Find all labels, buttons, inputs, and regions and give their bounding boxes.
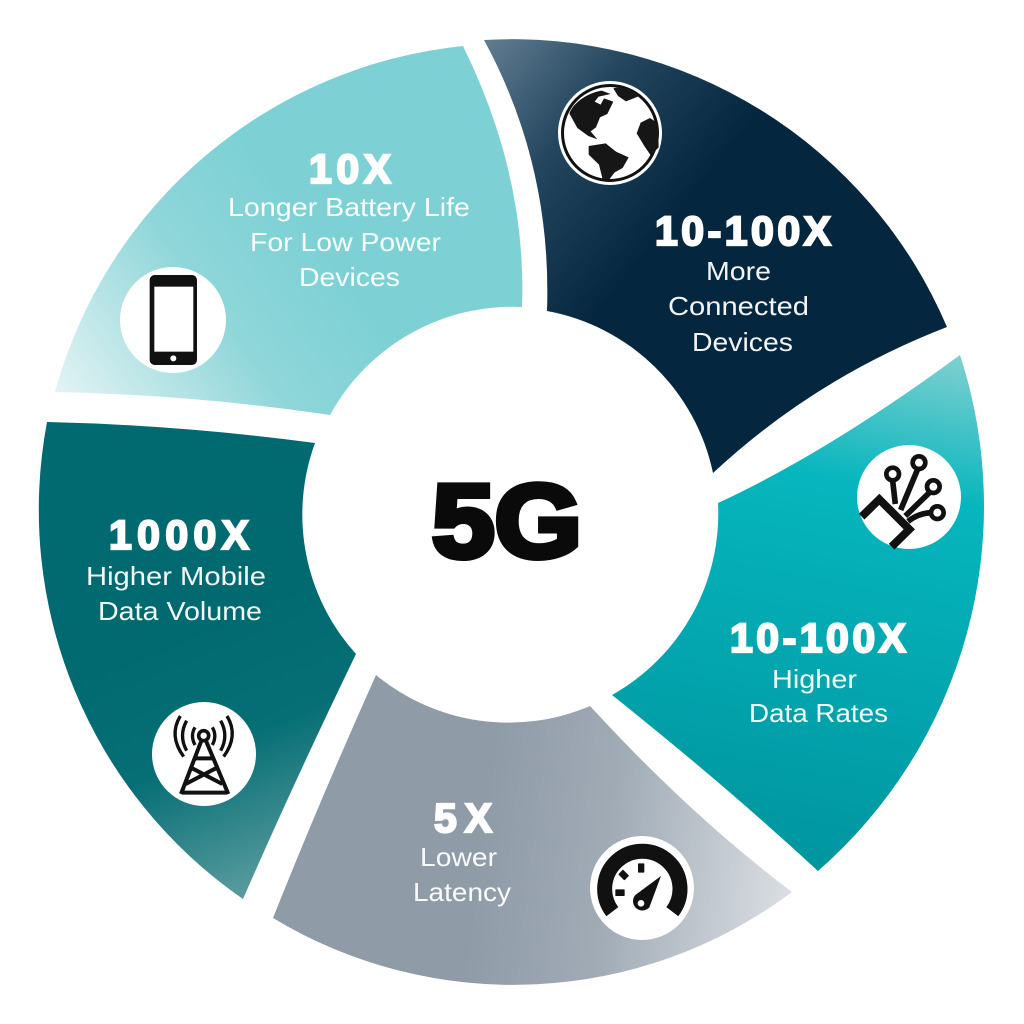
label: Lower Latency: [413, 842, 511, 907]
label: More Connected Devices: Devices: [692, 327, 793, 357]
label: Lower Latency: Lower: [420, 842, 497, 872]
label: Higher Data Rates: [749, 664, 888, 728]
segment: higher data rates: [612, 355, 984, 871]
icon: smartphone: [120, 267, 226, 373]
label: More Connected Devices: Connected: [668, 291, 809, 321]
label: Higher Mobile Data Volume: Data Volume: [98, 596, 262, 626]
stat: 1000X: 1000X: [109, 512, 249, 558]
stat: 10-100X: 10-100X: [655, 208, 831, 254]
label: Longer Battery Life For Low Power Devices: Longer Battery Life: [228, 192, 470, 222]
label: More Connected Devices: [668, 256, 809, 357]
segment: lower latency: [273, 675, 792, 985]
label: Higher Data Rates: Higher: [772, 664, 857, 694]
icon: globe: [558, 81, 662, 185]
center title: 5G: 5G: [432, 464, 582, 580]
stat: 10-100X: 10-100X: [730, 615, 906, 661]
label: Lower Latency: Latency: [413, 877, 511, 907]
label: Higher Mobile Data Volume: Higher Mobile: [86, 561, 266, 591]
segment: longer battery life: [55, 46, 522, 415]
label: Longer Battery Life For Low Power Devices: [228, 192, 470, 292]
label: Higher Mobile Data Volume: [86, 561, 266, 626]
label: Higher Data Rates: Data Rates: [749, 698, 888, 728]
label: Longer Battery Life For Low Power Devices: Devices: [299, 262, 400, 292]
label: More Connected Devices: More: [706, 256, 771, 286]
stat: 10X: 10X: [309, 146, 391, 192]
icon: cell tower: [152, 702, 256, 806]
icon: fiber optic: [857, 445, 961, 549]
label: Longer Battery Life For Low Power Devices: For Low Power: [250, 227, 441, 257]
segment: more connected devices: [484, 39, 947, 473]
icon: speedometer: [590, 836, 694, 940]
segment: higher mobile data volume: [39, 422, 356, 899]
stat: 5X: 5X: [434, 795, 492, 841]
